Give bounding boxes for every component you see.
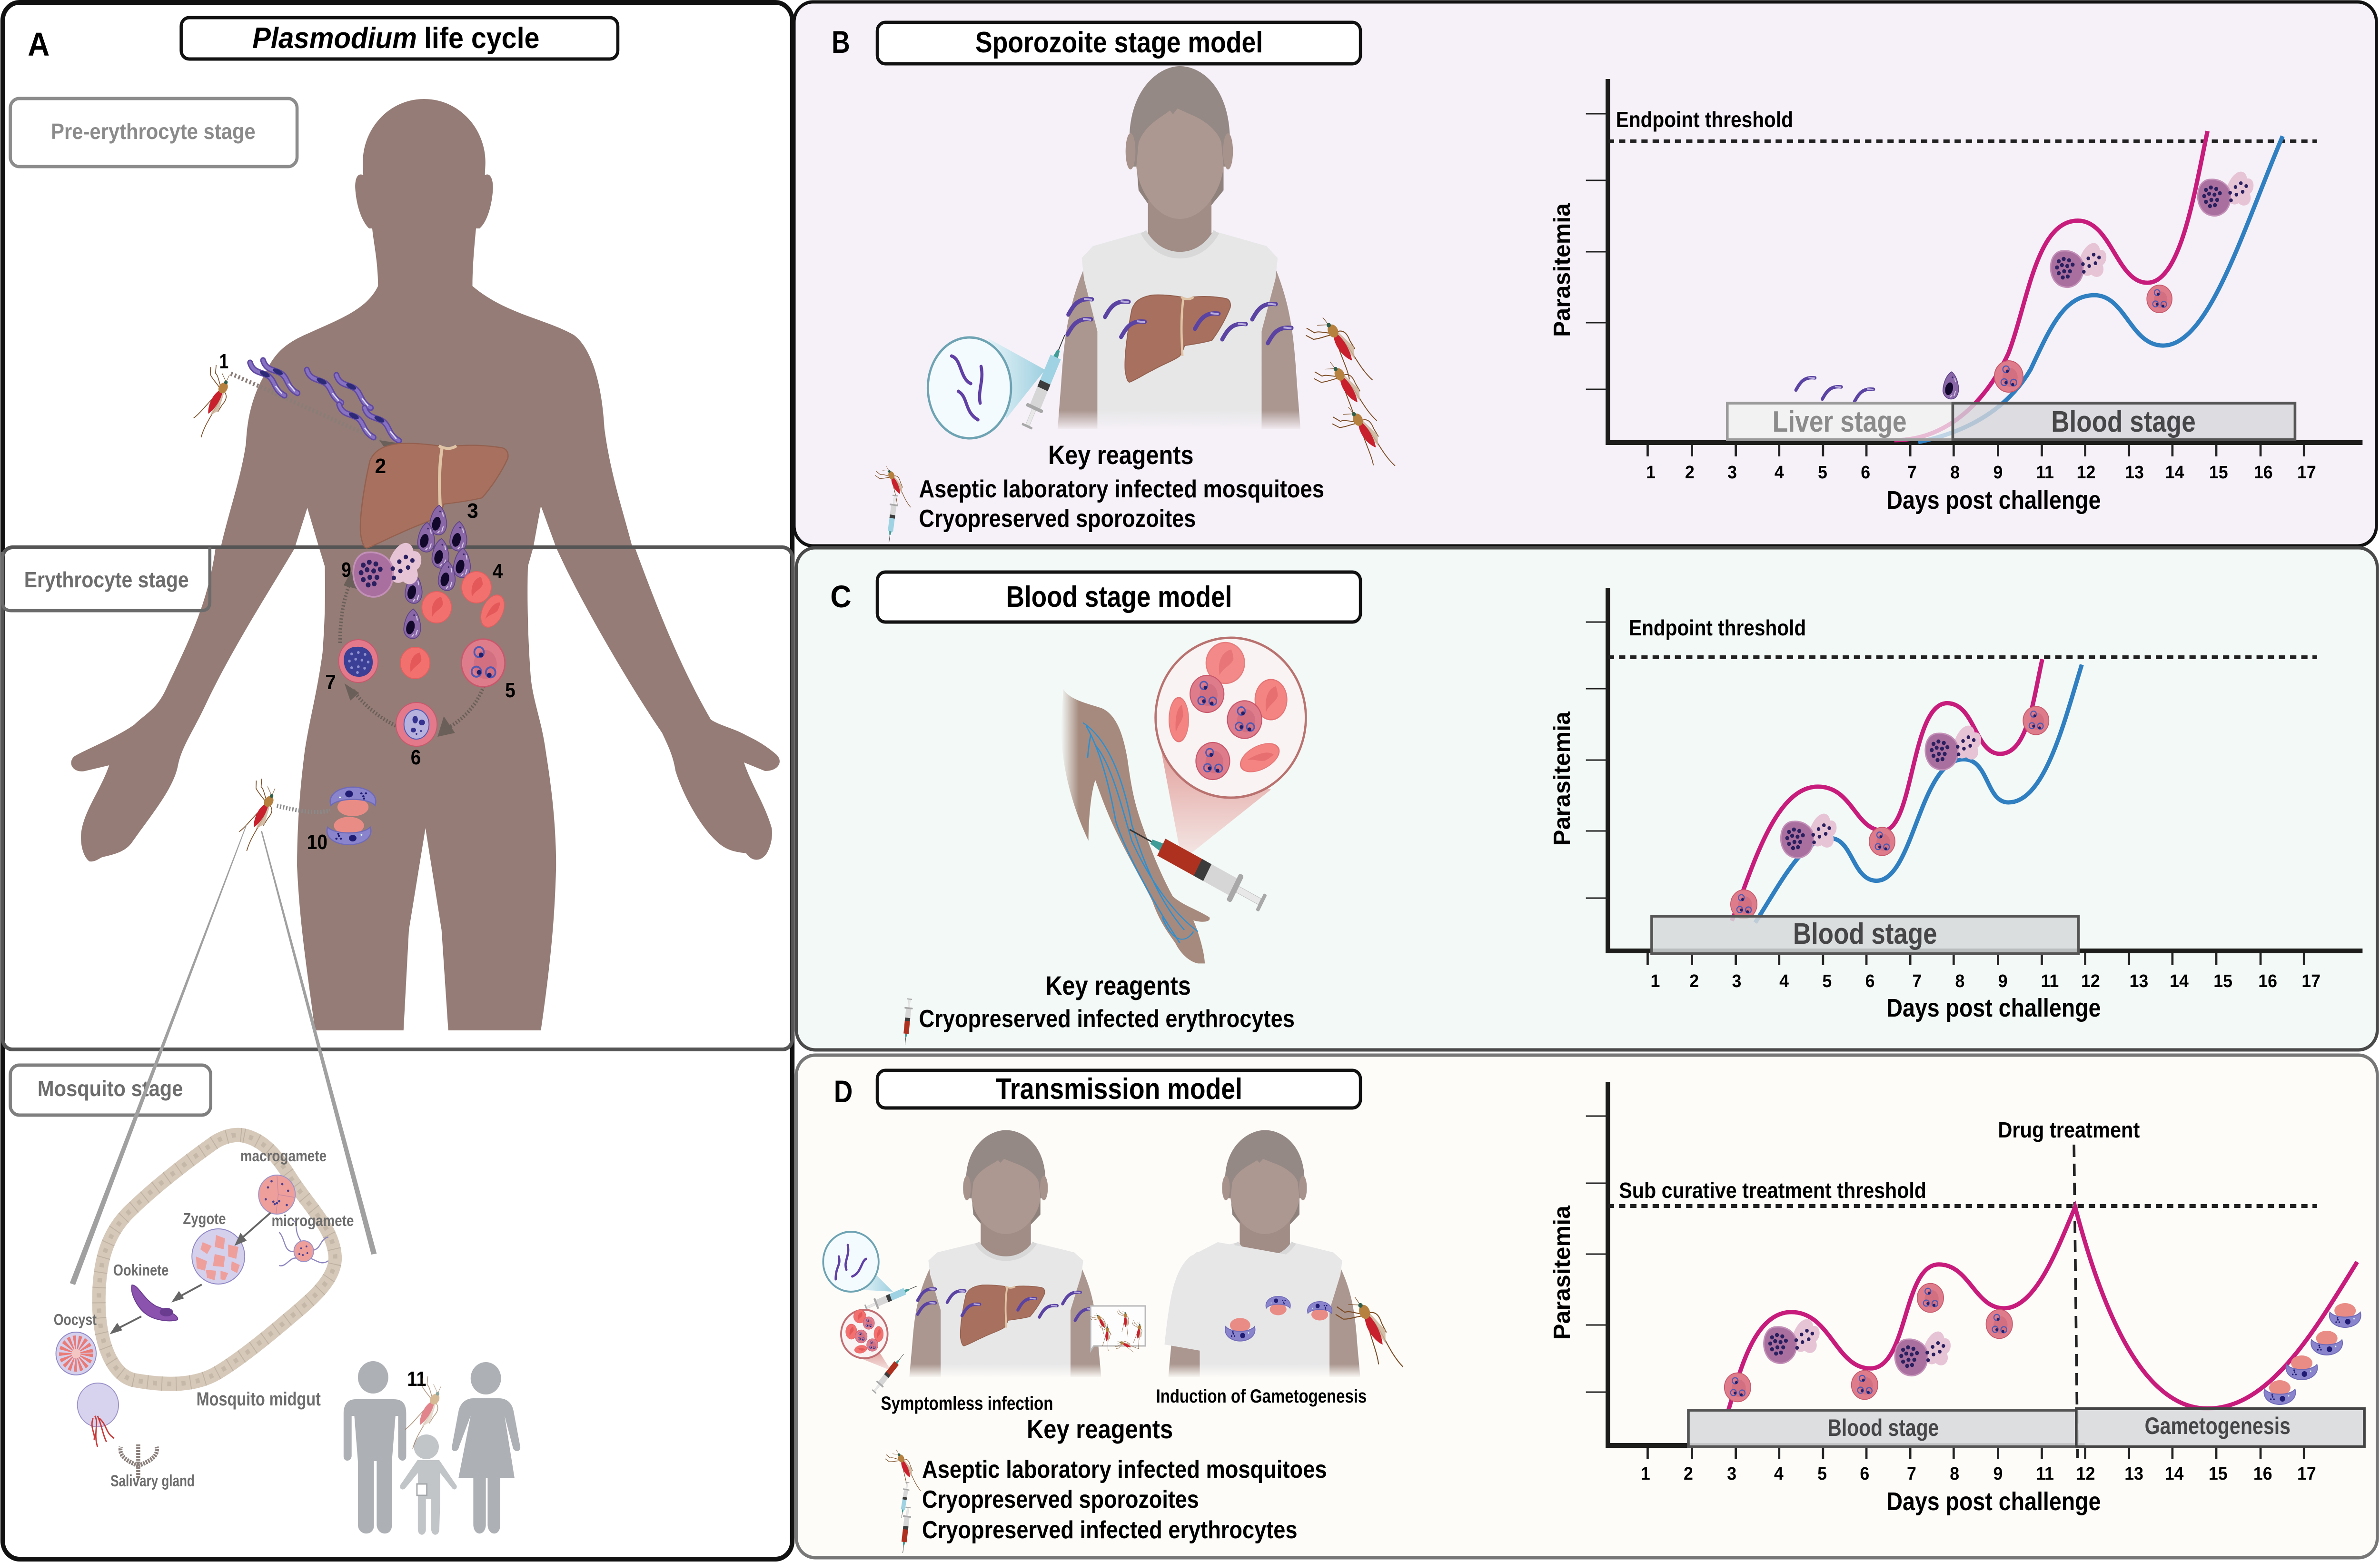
icon: gametocytes (327, 787, 376, 845)
chart: blood stage parasitemia: Blood stage (1793, 917, 1937, 950)
chart: blood stage parasitemia: Endpoint threshold (1629, 616, 1806, 640)
chart: transmission parasitemia: 12 (2076, 1463, 2095, 1483)
icon: family silhouettes (344, 1361, 520, 1535)
panel letter A: A (28, 26, 50, 63)
icon: syringe with blood (1123, 816, 1269, 917)
icon: rupturing oocyst (78, 1383, 119, 1447)
chart: sporozoite parasitemia: Days post challenge (1886, 486, 2101, 514)
chart: transmission parasitemia: 8 (1950, 1463, 1959, 1483)
icon: red blood cells (400, 572, 509, 679)
chart: blood stage parasitemia: 17 (2301, 971, 2320, 991)
step numbers: 9 (341, 558, 351, 582)
erythrocyte band outline (3, 547, 792, 1049)
chart: transmission parasitemia: Drug treatment (1998, 1118, 2140, 1142)
icon: salivary gland (120, 1444, 157, 1478)
icon: reagent mosquito and syringe (874, 463, 911, 543)
step numbers: 11 (407, 1367, 426, 1391)
icon: biting mosquito (175, 362, 240, 437)
icon: oocyst (56, 1332, 96, 1375)
chart: blood stage parasitemia: 13 (2130, 971, 2148, 991)
chart: sporozoite parasitemia: 8 (1950, 462, 1960, 482)
chart: sporozoite parasitemia: Blood stage (2051, 405, 2196, 438)
icon: trophozoite cell (396, 702, 437, 746)
step numbers: 7 (325, 671, 336, 694)
chart: transmission parasitemia: 4 (1774, 1463, 1784, 1483)
chart: blood stage parasitemia: 6 (1865, 971, 1874, 991)
chart: blood stage parasitemia: Days post challenge (1886, 994, 2101, 1022)
chart: sporozoite parasitemia: 17 (2297, 462, 2316, 482)
chart: blood stage parasitemia: 14 (2170, 971, 2189, 991)
chart: transmission parasitemia: Parasitemia (1548, 1205, 1575, 1340)
step numbers: 1 (219, 350, 228, 373)
icon: sporozoite syringe (863, 1281, 919, 1314)
chart: transmission parasitemia: Gametogenesis (2145, 1413, 2291, 1439)
chart: blood stage parasitemia: 8 (1955, 971, 1964, 991)
chart: sporozoite parasitemia: 2 (1685, 462, 1695, 482)
chart: sporozoite parasitemia: 1 (1646, 462, 1656, 482)
chart: transmission parasitemia: 5 (1817, 1463, 1827, 1483)
body silhouette (71, 99, 780, 1030)
step numbers: 4 (493, 560, 503, 583)
icon: blood syringe (870, 1351, 907, 1395)
heading: sporozoite stage model (877, 22, 1360, 64)
icon: ring stage cell (461, 639, 505, 687)
chart: transmission parasitemia: 16 (2253, 1463, 2272, 1483)
text: key reagents: Cryopreserved infected erythrocytes (919, 1005, 1295, 1032)
illustration: gametogenesis volunteer (1164, 1130, 1360, 1377)
illustration: mosquito cage (1089, 1306, 1145, 1359)
caption: symptomless infection: Symptomless infection (881, 1393, 1053, 1414)
icon: schizont cell (338, 640, 378, 682)
icon: microgamete (279, 1220, 328, 1266)
chart: transmission parasitemia (1548, 1082, 2364, 1516)
magnifier: infected red blood cells (1156, 638, 1306, 855)
text: key reagents: Cryopreserved infected erythrocytes (922, 1516, 1298, 1543)
arrow: erythrocytic cycle (340, 583, 485, 728)
chart: transmission parasitemia: 6 (1860, 1463, 1869, 1483)
heading: transmission model (877, 1070, 1360, 1108)
label: pre-erythrocyte stage (10, 99, 297, 167)
midgut labels: Zygote (183, 1210, 226, 1227)
chart: blood stage parasitemia: 16 (2258, 971, 2277, 991)
chart: sporozoite parasitemia: 15 (2209, 462, 2228, 482)
text: key reagents: Key reagents (1027, 1414, 1173, 1444)
icon: feeding mosquito (1333, 1289, 1403, 1385)
midgut labels: Mosquito midgut (197, 1389, 321, 1410)
midgut labels: microgamete (271, 1212, 354, 1229)
icon: zygote (192, 1229, 245, 1284)
chart: blood stage parasitemia: 11 (2041, 971, 2059, 991)
chart: sporozoite parasitemia: 3 (1727, 462, 1737, 482)
text: key reagents (919, 971, 1295, 1032)
chart: sporozoite parasitemia: 14 (2165, 462, 2184, 482)
panel B: sporozoite stage model (794, 2, 2376, 546)
step numbers: 3 (467, 499, 478, 523)
panel A: Plasmodium life cycle (3, 2, 792, 1559)
panel letter C: C (830, 579, 852, 614)
heading: blood stage model: Blood stage model (1006, 580, 1232, 613)
panel letter D: D (834, 1074, 853, 1109)
icon: faded mosquito (387, 1374, 452, 1449)
icon: reagent mosquito and syringes (883, 1446, 921, 1553)
chart: sporozoite parasitemia: 5 (1818, 462, 1827, 482)
chart: sporozoite parasitemia: Liver stage (1773, 405, 1907, 438)
chart: sporozoite parasitemia: 9 (1993, 462, 2003, 482)
arrow: sporozoite path to liver (231, 374, 402, 460)
icon: sporozoites migrating (250, 360, 399, 441)
chart: sporozoite parasitemia: 6 (1861, 462, 1870, 482)
midgut labels: Oocyst (54, 1311, 97, 1328)
heading: Plasmodium life cycle: life cycle (424, 21, 539, 54)
icon: merozoites released (404, 505, 470, 639)
step numbers (219, 350, 516, 1391)
illustration: symptomless volunteer (909, 1130, 1101, 1377)
chart: blood stage parasitemia (1548, 588, 2362, 1022)
chart: transmission parasitemia: Sub curative treatment threshold (1619, 1179, 1926, 1203)
heading: blood stage model (877, 572, 1360, 622)
icon: infected mosquitoes (1303, 309, 1395, 484)
chart: transmission parasitemia: 13 (2124, 1463, 2143, 1483)
illustration: arm with veins (1061, 689, 1210, 963)
panel D: transmission model (796, 1055, 2377, 1558)
chart: transmission parasitemia: 9 (1993, 1463, 2003, 1483)
chart: transmission parasitemia: 15 (2209, 1463, 2228, 1483)
text: key reagents (919, 440, 1324, 532)
heading: Plasmodium life cycle (181, 18, 618, 59)
icon: macrogamete (258, 1175, 295, 1214)
midgut labels: macrogamete (240, 1147, 327, 1165)
text: key reagents: Aseptic laboratory infected mosquitoes (922, 1455, 1327, 1483)
text: key reagents: Cryopreserved sporozoites (919, 504, 1196, 532)
arrowheads: erythrocytic cycle (344, 571, 455, 737)
magnifier: sporozoites (928, 337, 1045, 438)
chart: sporozoite parasitemia: Endpoint threshold (1616, 108, 1793, 132)
chart: transmission parasitemia: 17 (2297, 1463, 2316, 1483)
chart: blood stage parasitemia: 7 (1912, 971, 1922, 991)
text: key reagents: Cryopreserved sporozoites (922, 1485, 1199, 1513)
panel C: blood stage model (796, 548, 2377, 1050)
label: mosquito stage: Mosquito stage (38, 1077, 183, 1101)
chart: transmission parasitemia: 11 (2036, 1463, 2054, 1483)
label: pre-erythrocyte stage: Pre-erythrocyte stage (51, 120, 256, 144)
panel letter B: B (832, 24, 850, 59)
heading: transmission model: Transmission model (996, 1072, 1242, 1105)
chart: blood stage parasitemia: 15 (2213, 971, 2232, 991)
chart: sporozoite parasitemia: 11 (2036, 462, 2054, 482)
chart: transmission parasitemia: 14 (2165, 1463, 2184, 1483)
chart: sporozoite parasitemia: 13 (2125, 462, 2144, 482)
midgut labels (54, 1147, 354, 1490)
chart: transmission parasitemia: Blood stage (1827, 1415, 1939, 1441)
chart: sporozoite parasitemia (1548, 79, 2362, 514)
step numbers: 2 (375, 455, 386, 478)
step numbers: 5 (505, 679, 516, 702)
step numbers: 10 (307, 830, 327, 854)
chart: sporozoite parasitemia: 7 (1907, 462, 1917, 482)
icon: rupturing schizont (353, 543, 421, 597)
heading: sporozoite stage model: Sporozoite stage model (975, 26, 1263, 59)
chart: blood stage parasitemia: 2 (1689, 971, 1699, 991)
icon: feeding mosquito (220, 776, 286, 851)
chart: sporozoite parasitemia: 4 (1775, 462, 1784, 482)
chart: blood stage parasitemia: 4 (1779, 971, 1789, 991)
chart: blood stage parasitemia: 5 (1822, 971, 1832, 991)
chart: blood stage parasitemia: 3 (1732, 971, 1741, 991)
icon: syringe with sporozoites (1019, 331, 1073, 431)
chart: blood stage parasitemia: Parasitemia (1548, 711, 1575, 846)
midgut labels: Salivary gland (110, 1472, 195, 1490)
midgut labels: Ookinete (113, 1261, 169, 1279)
chart: transmission parasitemia: 1 (1641, 1463, 1650, 1483)
chart: transmission parasitemia: 3 (1727, 1463, 1736, 1483)
chart: blood stage parasitemia: 1 (1651, 971, 1660, 991)
label: erythrocyte stage (3, 547, 210, 611)
text: key reagents: Key reagents (1045, 971, 1191, 1000)
chart: transmission parasitemia: 2 (1684, 1463, 1693, 1483)
chart: transmission parasitemia: Days post challenge (1886, 1488, 2101, 1516)
chart: sporozoite parasitemia: 12 (2077, 462, 2095, 482)
heading: Plasmodium life cycle: Plasmodium (252, 21, 417, 54)
midgut arrows (112, 1213, 271, 1333)
label: mosquito stage (10, 1065, 211, 1115)
line: gametocyte uptake (277, 806, 330, 812)
zoom lines to midgut (70, 825, 377, 1285)
text: key reagents (922, 1414, 1327, 1543)
icon: ookinete (131, 1285, 178, 1321)
chart: sporozoite parasitemia: 16 (2254, 462, 2273, 482)
step numbers: 6 (411, 746, 421, 769)
chart: sporozoite parasitemia: Parasitemia (1548, 203, 1575, 337)
magnifier: infected red blood cells (841, 1310, 891, 1371)
magnifier: sporozoites (823, 1232, 893, 1292)
text: key reagents: Key reagents (1048, 440, 1194, 470)
chart: blood stage parasitemia: 9 (1998, 971, 2008, 991)
illustration: volunteer with liver (1058, 66, 1300, 429)
illustration: mosquito midgut (99, 1135, 335, 1384)
caption: induction of gametogenesis: Induction of Gametogenesis (1156, 1386, 1367, 1407)
chart: blood stage parasitemia: 12 (2081, 971, 2100, 991)
icon: liver (360, 444, 508, 548)
icon: reagent red syringe (901, 998, 914, 1045)
label: erythrocyte stage: Erythrocyte stage (24, 568, 189, 592)
chart: transmission parasitemia: 7 (1907, 1463, 1916, 1483)
text: key reagents: Aseptic laboratory infected mosquitoes (919, 475, 1324, 503)
